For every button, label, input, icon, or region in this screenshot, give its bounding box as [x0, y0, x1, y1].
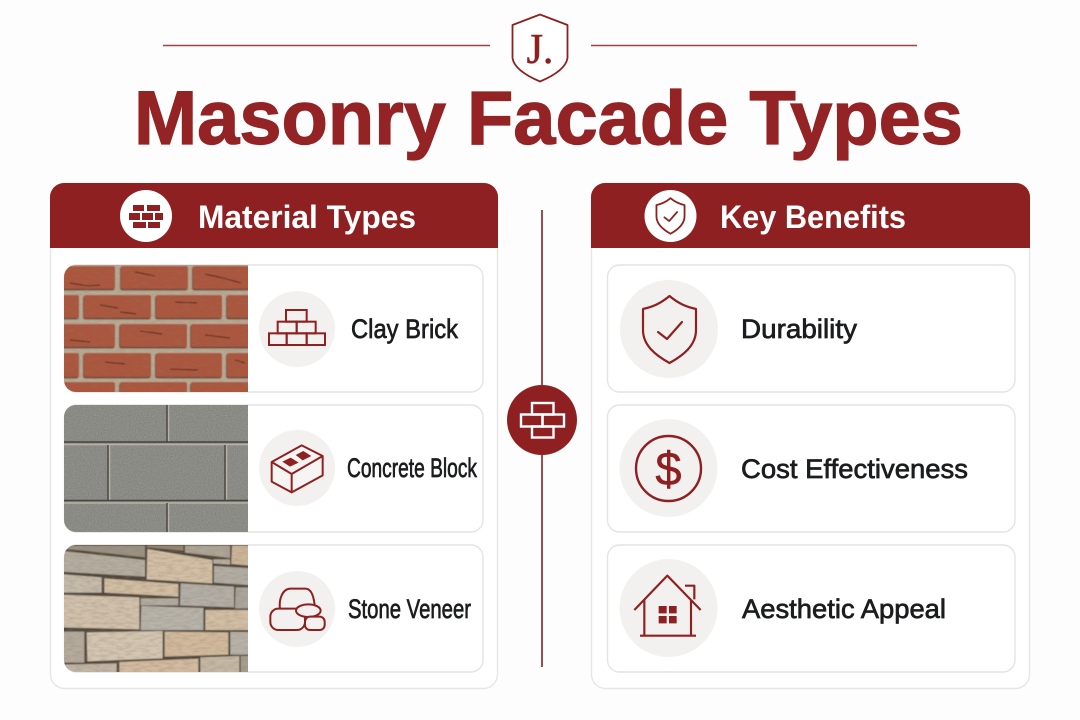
label: stone veneer: Stone Veneer [348, 594, 471, 624]
card: aesthetic appeal [608, 545, 1015, 672]
panel header: key benefits: Key Benefits [720, 199, 906, 235]
icon: dollar coin [620, 419, 718, 517]
logo: shield with J.: J. [527, 27, 553, 73]
icon: house [620, 559, 718, 657]
card: clay brick [56, 262, 483, 398]
center brick badge [507, 385, 577, 455]
icon: stones [259, 571, 335, 647]
title: Masonry Facade Types [134, 76, 963, 161]
label: aesthetic appeal: Aesthetic Appeal [742, 594, 946, 624]
icon: dollar coin: $ [655, 442, 682, 495]
card: stone veneer [60, 541, 483, 676]
label: cost effectiveness: Cost Effectiveness [741, 454, 968, 484]
panel header: material types [50, 183, 498, 248]
label: durability: Durability [741, 314, 858, 344]
icon: stacked bricks [259, 291, 335, 367]
logo divider right [591, 44, 917, 46]
label: concrete block: Concrete Block [347, 453, 477, 483]
card: durability [608, 265, 1015, 392]
panel: key benefits [591, 183, 1030, 688]
panel header: key benefits [591, 183, 1030, 248]
photo: clay brick wall [64, 265, 248, 392]
logo: shield with J. [512, 14, 568, 82]
panel: material types [50, 183, 498, 688]
card: concrete block [64, 405, 483, 532]
label: clay brick: Clay Brick [351, 314, 458, 344]
card: cost effectiveness [608, 405, 1015, 532]
icon: shield check [620, 280, 718, 378]
photo: stone wall [64, 545, 248, 672]
panel header: material types: Material Types [198, 199, 416, 235]
icon: concrete block [259, 430, 335, 506]
logo divider left [163, 44, 490, 46]
photo: concrete block wall [64, 405, 248, 532]
center divider line [541, 210, 543, 667]
